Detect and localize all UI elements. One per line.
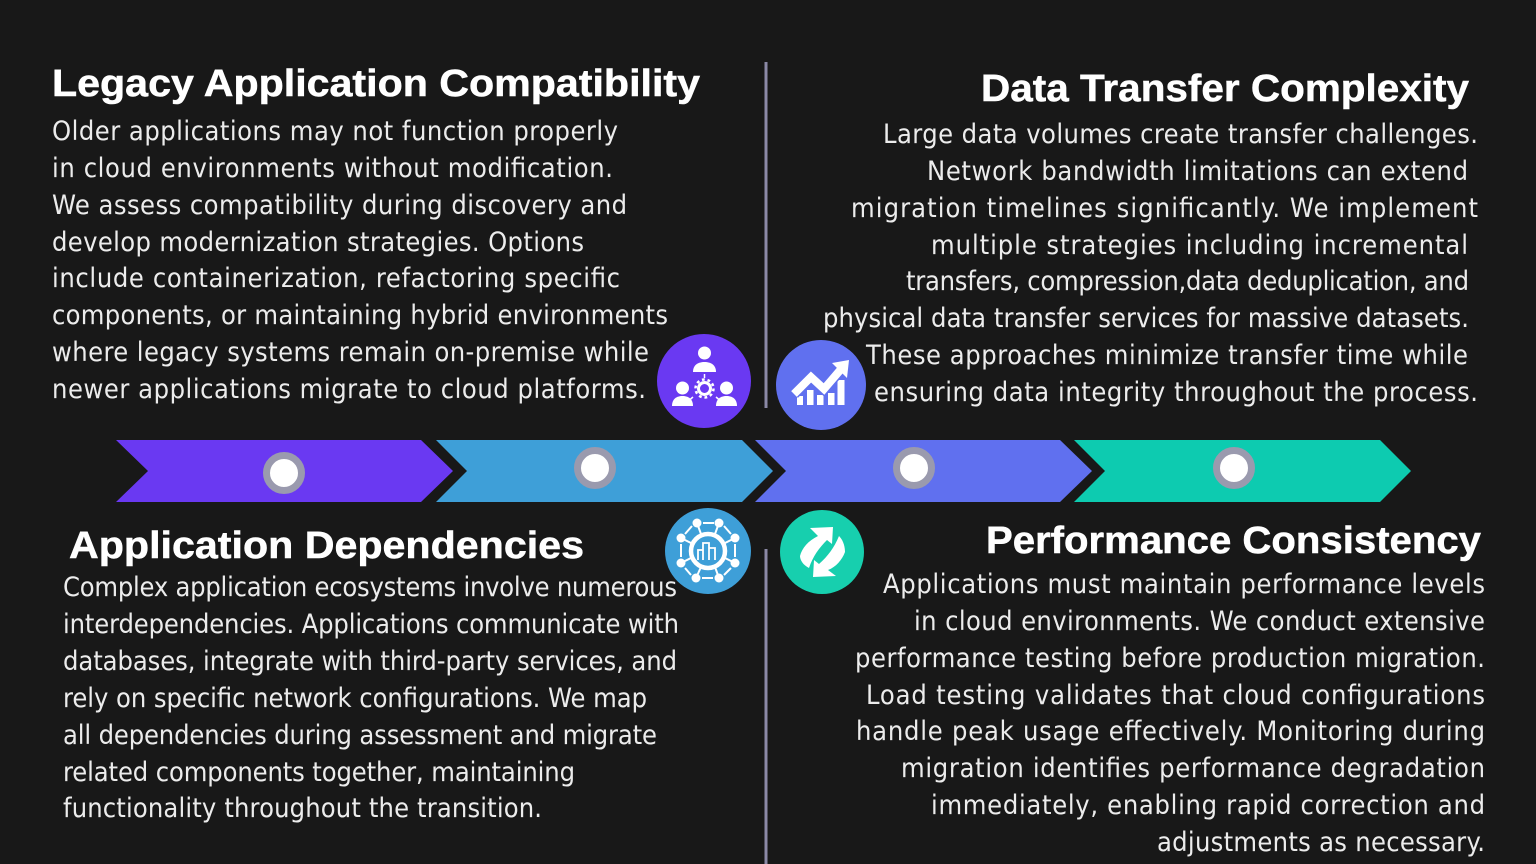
arrow: step 1 xyxy=(116,440,453,502)
panel: Data Transfer Complexity xyxy=(823,68,1478,408)
text block: legacy description: We assess compatibility during discovery and xyxy=(52,190,627,221)
icon: network with chart hub xyxy=(665,508,751,594)
text block: data transfer description: multiple strategies including incremental xyxy=(931,230,1468,261)
text block: legacy description: develop modernization strategies. Options xyxy=(52,227,584,258)
marker: step 1 xyxy=(266,456,302,490)
text block: dependencies description: all dependencies during assessment and migrate xyxy=(63,720,657,751)
text block: data transfer description: These approaches minimize transfer time while xyxy=(865,340,1468,371)
text block: legacy description: components, or maintaining hybrid environments xyxy=(52,300,668,331)
text block: performance description: performance testing before production migration. xyxy=(855,643,1485,674)
heading: Legacy Application Compatibility: Legacy Application Compatibility xyxy=(52,63,700,105)
text block: data transfer description: physical data transfer services for massive datasets. xyxy=(823,303,1469,334)
icon: refresh arrows xyxy=(780,510,864,594)
text block: performance description: Load testing validates that cloud configurations xyxy=(866,680,1485,711)
text block: legacy description: where legacy systems remain on-premise while xyxy=(52,337,649,368)
icon: people and gear xyxy=(657,334,751,428)
text block: dependencies description: related components together, maintaining xyxy=(63,757,575,788)
text block: dependencies description: Complex application ecosystems involve numerous xyxy=(63,572,677,603)
text block: performance description: adjustments as necessary. xyxy=(1157,827,1485,858)
marker: step 2 xyxy=(578,450,612,486)
panel: Application Dependencies xyxy=(63,525,679,824)
text block: performance description xyxy=(855,569,1485,858)
text block: data transfer description: transfers, compression,data deduplication, and xyxy=(906,266,1469,297)
arrow: step 2 xyxy=(436,440,773,502)
text block: performance description: immediately, enabling rapid correction and xyxy=(931,790,1485,821)
text block: legacy description xyxy=(52,116,668,405)
text block: data transfer description: Network bandwidth limitations can extend xyxy=(927,156,1468,187)
text block: legacy description: include containerization, refactoring specific xyxy=(52,263,620,294)
panel: Performance Consistency xyxy=(855,520,1485,858)
text block: data transfer description: migration timelines significantly. We implement xyxy=(851,193,1478,224)
text block: legacy description: newer applications migrate to cloud platforms. xyxy=(52,374,646,405)
text block: data transfer description xyxy=(823,119,1478,408)
icon: growth chart xyxy=(776,340,866,430)
text block: performance description: in cloud environments. We conduct extensive xyxy=(914,606,1485,637)
marker: step 4 xyxy=(1216,450,1252,486)
text block: performance description: migration identifies performance degradation xyxy=(901,753,1485,784)
marker: step 3 xyxy=(896,450,932,486)
heading: Data Transfer Complexity: Data Transfer Complexity xyxy=(981,68,1469,110)
heading: Performance Consistency: Performance Consistency xyxy=(986,520,1481,562)
arrow: step 3 xyxy=(755,440,1092,502)
text block: performance description: handle peak usage effectively. Monitoring during xyxy=(856,716,1485,747)
text block: dependencies description xyxy=(63,572,679,824)
text block: dependencies description: rely on specific network configurations. We map xyxy=(63,683,647,714)
text block: legacy description: Older applications may not function properly xyxy=(52,116,618,147)
text block: data transfer description: ensuring data integrity throughout the process. xyxy=(874,377,1478,408)
text block: dependencies description: functionality throughout the transition. xyxy=(63,793,542,824)
text block: performance description: Applications must maintain performance levels xyxy=(883,569,1485,600)
panel: Legacy Application Compatibility xyxy=(52,63,700,405)
text block: dependencies description: databases, integrate with third-party services, and xyxy=(63,646,677,677)
arrow: step 4 xyxy=(1074,440,1411,502)
heading: Application Dependencies: Application Dependencies xyxy=(69,525,584,567)
timeline arrows xyxy=(116,440,1411,502)
text block: legacy description: in cloud environments without modification. xyxy=(52,153,613,184)
text block: dependencies description: interdependencies. Applications communicate with xyxy=(63,609,679,640)
text block: data transfer description: Large data volumes create transfer challenges. xyxy=(883,119,1478,150)
